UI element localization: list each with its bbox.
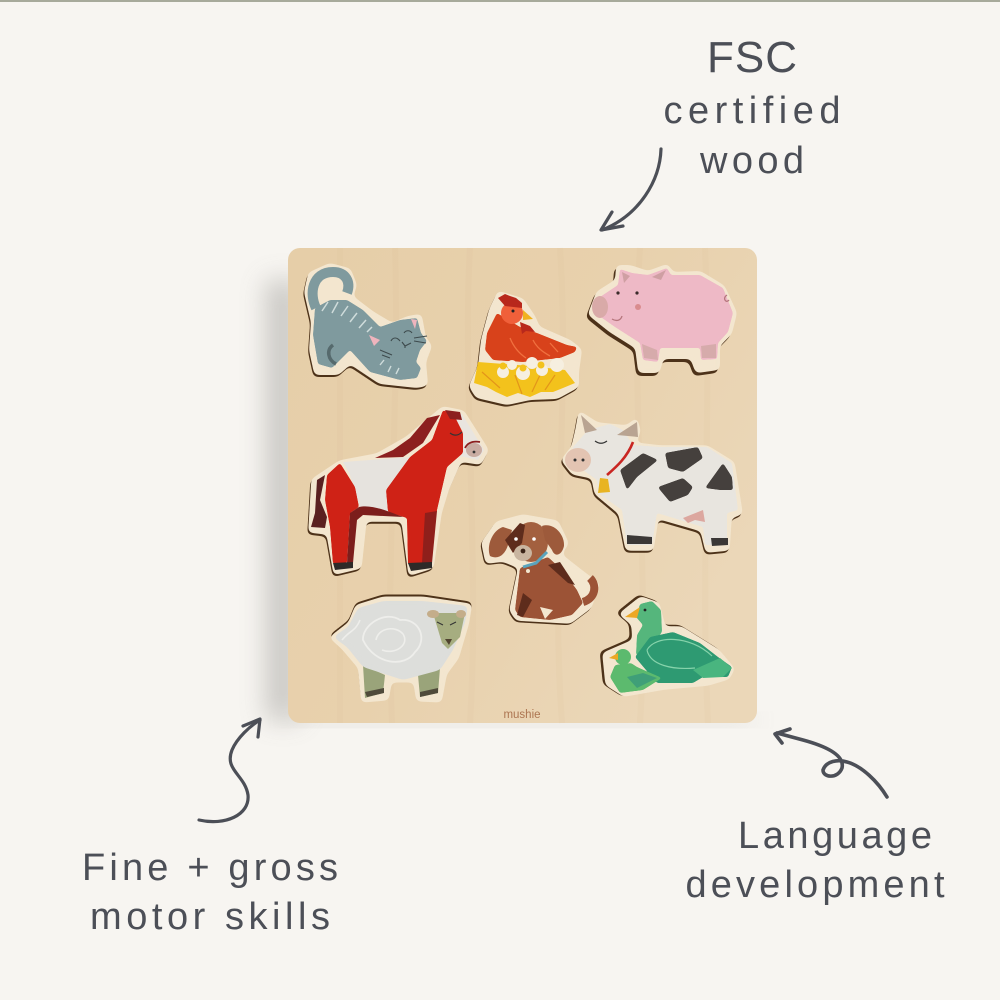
callout: language development bbox=[686, 815, 945, 906]
puzzle piece: cow bbox=[562, 413, 741, 553]
puzzle piece: ducks bbox=[602, 597, 733, 695]
arrow: to language development bbox=[775, 729, 887, 797]
brand mark: mushie bbox=[503, 709, 541, 721]
puzzle piece: sheep bbox=[332, 596, 470, 700]
puzzle piece: horse bbox=[309, 408, 487, 576]
callout: language development: Language bbox=[738, 815, 932, 857]
callout: FSC certified wood: wood bbox=[699, 140, 804, 182]
callout: language development: development bbox=[686, 864, 945, 906]
callout: FSC certified wood bbox=[664, 33, 840, 182]
callout: fine and gross motor skills bbox=[82, 847, 338, 938]
top border bbox=[0, 0, 1000, 2]
puzzle piece: hen bbox=[470, 293, 580, 405]
puzzle piece: cat bbox=[305, 265, 430, 388]
puzzle piece: pig bbox=[588, 266, 735, 374]
callout: FSC certified wood: certified bbox=[664, 90, 840, 132]
arrow: to motor skills bbox=[199, 719, 260, 822]
callout: FSC certified wood: FSC bbox=[707, 33, 797, 82]
callout: fine and gross motor skills: motor skills bbox=[90, 896, 330, 938]
callout: fine and gross motor skills: Fine + gross bbox=[82, 847, 338, 889]
puzzle piece: dog bbox=[482, 516, 598, 624]
arrow: to FSC wood board bbox=[601, 149, 661, 230]
board shadow bbox=[266, 280, 752, 726]
wooden board bbox=[288, 248, 757, 723]
